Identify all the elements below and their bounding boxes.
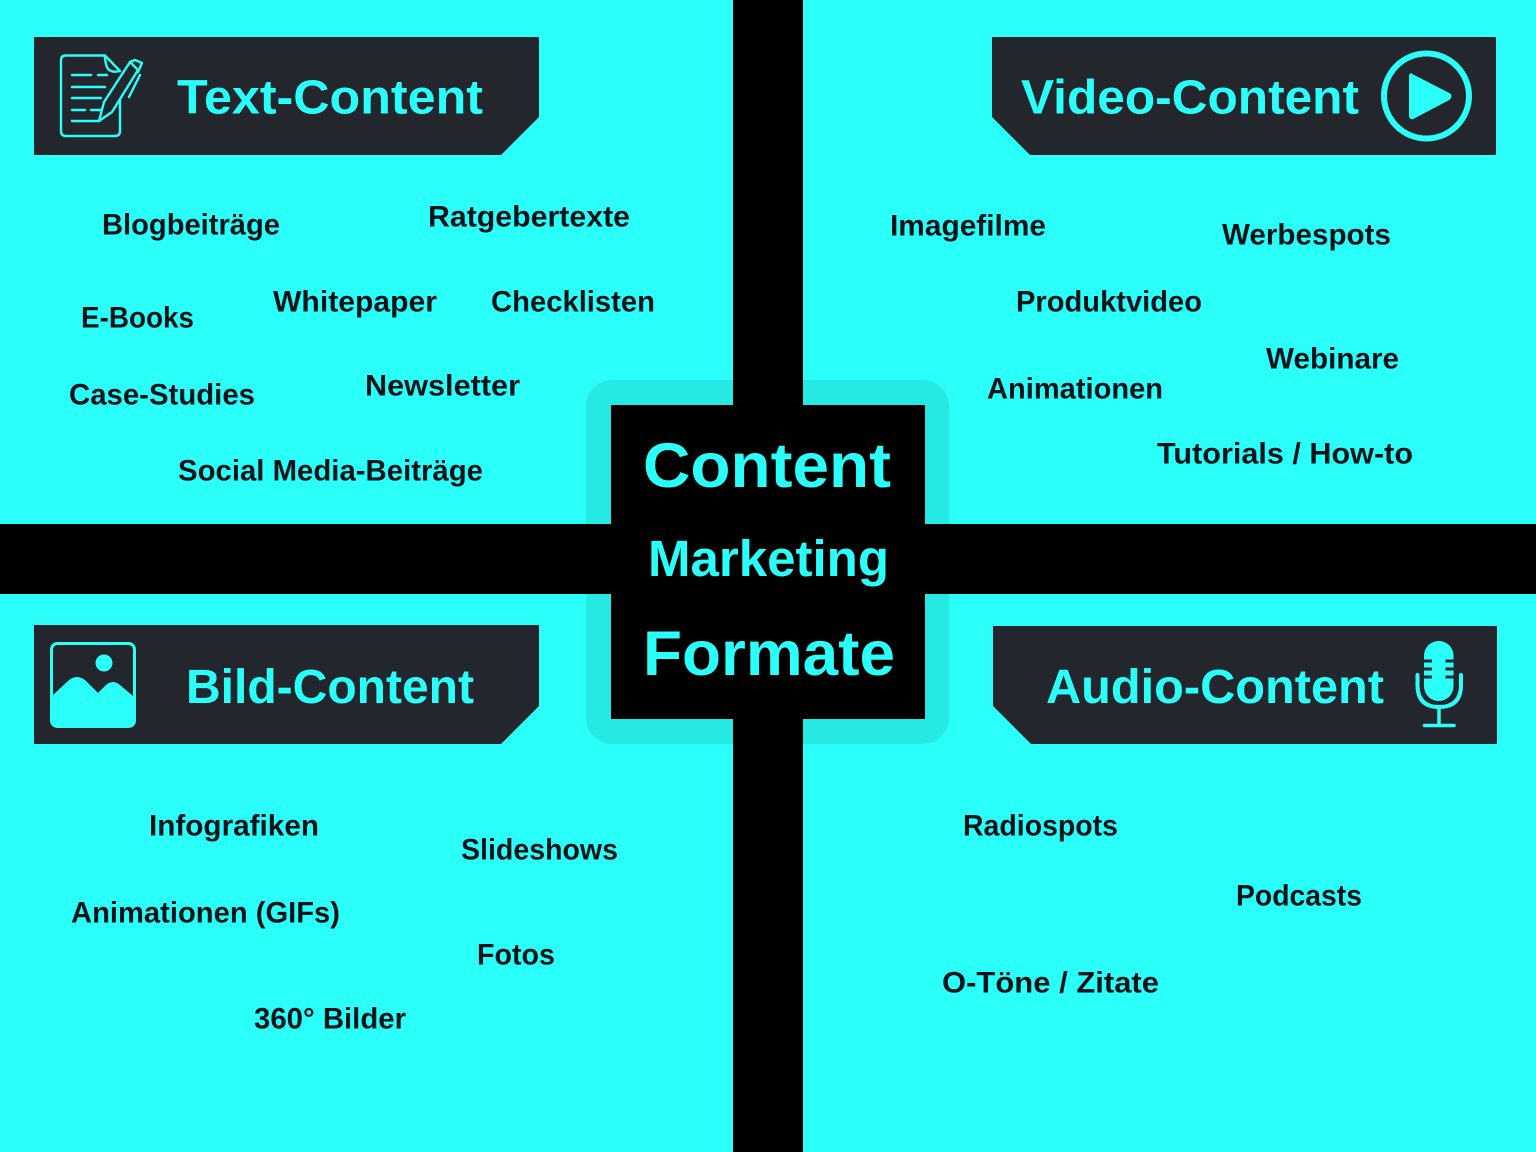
heading: Video-Content: Video-Content	[1021, 72, 1359, 124]
list: text formats: Whitepaper	[273, 286, 438, 319]
list: image formats: Infografiken	[149, 810, 319, 843]
panel: Bild-Content	[34, 625, 618, 1036]
banner: Bild-Content	[34, 625, 539, 744]
center square	[611, 405, 925, 719]
center halo	[586, 380, 949, 744]
list: text formats: Blogbeiträge	[102, 209, 280, 242]
banner: Video-Content	[992, 37, 1496, 155]
list: video formats	[890, 210, 1413, 471]
list: audio formats: Radiospots	[963, 810, 1118, 843]
banner: Text-Content	[34, 37, 539, 155]
vertical bar	[733, 0, 803, 1152]
center title: Formate	[643, 619, 895, 689]
list: text formats: Case-Studies	[69, 379, 255, 412]
center title: Content	[643, 431, 891, 501]
icon: image	[52, 644, 134, 727]
list: image formats: Animationen (GIFs)	[71, 897, 340, 930]
list: video formats: Animationen	[987, 373, 1163, 406]
list: video formats: Produktvideo	[1016, 286, 1202, 319]
list: text formats: Ratgebertexte	[428, 201, 630, 234]
list: image formats: 360° Bilder	[254, 1003, 407, 1036]
list: text formats: E-Books	[81, 302, 194, 335]
heading: Audio-Content: Audio-Content	[1046, 661, 1384, 714]
panel: Audio-Content	[942, 626, 1497, 1000]
icon: microphone	[1418, 641, 1461, 726]
list: audio formats: O-Töne / Zitate	[942, 967, 1159, 1000]
list: audio formats: Podcasts	[1236, 880, 1362, 913]
horizontal bar	[0, 524, 1536, 594]
list: text formats: Newsletter	[365, 370, 521, 403]
center title: Marketing	[648, 530, 889, 587]
list: text formats	[69, 201, 655, 488]
heading: Text-Content: Text-Content	[177, 72, 483, 124]
list: text formats: Checklisten	[491, 286, 655, 319]
heading: Bild-Content: Bild-Content	[186, 661, 474, 714]
list: video formats: Werbespots	[1222, 219, 1391, 252]
center block	[586, 380, 949, 744]
list: text formats: Social Media-Beiträge	[178, 455, 483, 488]
banner: Audio-Content	[993, 626, 1497, 744]
panel: Text-Content	[34, 37, 655, 488]
icon: document and pen	[61, 56, 142, 136]
icon: play button	[1384, 54, 1469, 138]
list: video formats: Webinare	[1266, 343, 1399, 376]
list: video formats: Imagefilme	[890, 210, 1046, 243]
list: image formats: Fotos	[477, 939, 555, 972]
panel: Video-Content	[890, 37, 1496, 471]
list: image formats	[71, 810, 618, 1036]
list: image formats: Slideshows	[461, 834, 618, 867]
list: video formats: Tutorials / How-to	[1157, 438, 1413, 471]
center title	[643, 431, 895, 689]
list: audio formats	[942, 810, 1362, 1000]
